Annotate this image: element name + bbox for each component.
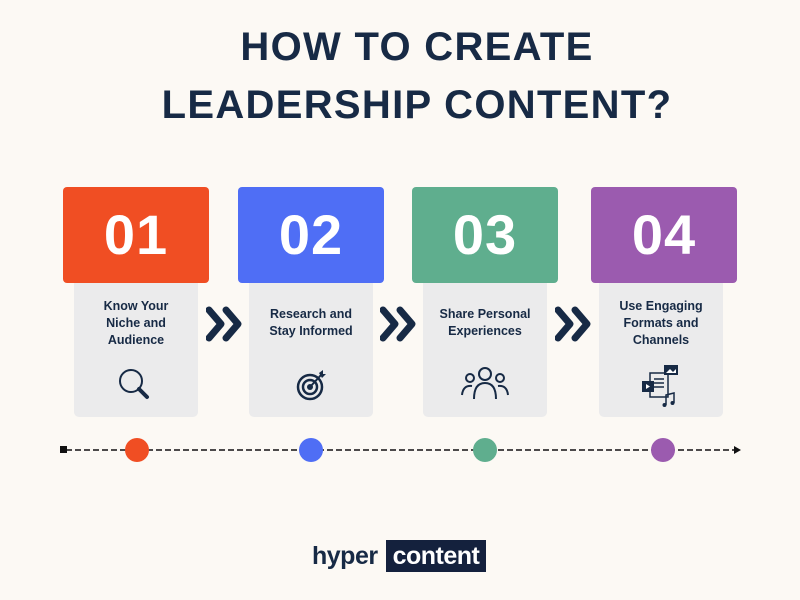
card 2: Stay Informed — [269, 324, 353, 338]
number 03: 03 — [453, 203, 517, 266]
dot 4 — [651, 438, 675, 462]
chevron 2 — [380, 306, 416, 342]
number 02 — [238, 187, 384, 283]
logo — [312, 540, 486, 572]
step 2 — [238, 187, 384, 417]
logo: hyper — [312, 542, 378, 570]
chevron 3 — [555, 306, 590, 342]
title — [162, 25, 672, 127]
dot 2 — [299, 438, 323, 462]
card 4: Formats and — [623, 316, 698, 330]
card 3: Share Personal — [439, 307, 530, 321]
icon: magnifier — [119, 369, 150, 400]
card 3: Experiences — [448, 324, 522, 338]
card 1: Niche and — [106, 316, 166, 330]
dot 3 — [473, 438, 497, 462]
card 4: Channels — [633, 333, 689, 347]
logo: content — [393, 542, 479, 570]
number 03 — [412, 187, 558, 283]
number 01 — [63, 187, 209, 283]
card 1: Audience — [108, 333, 164, 347]
card 3 — [423, 283, 547, 417]
card 2: Research and — [270, 307, 352, 321]
card 2 — [249, 283, 373, 417]
title: HOW TO CREATE — [240, 25, 594, 69]
timeline — [60, 446, 741, 454]
step 3 — [412, 187, 558, 417]
card 1: Know Your — [104, 299, 168, 313]
icon: people — [461, 367, 509, 399]
step 1 — [63, 187, 209, 417]
icon: media — [642, 365, 678, 407]
chevron 1 — [206, 306, 242, 342]
step 4 — [591, 187, 737, 417]
number 01: 01 — [104, 203, 168, 266]
number 04 — [591, 187, 737, 283]
card 1 — [74, 283, 198, 417]
title: LEADERSHIP CONTENT? — [162, 83, 672, 127]
dot 1 — [125, 438, 149, 462]
number 04: 04 — [632, 203, 696, 266]
number 02: 02 — [279, 203, 343, 266]
card 4 — [599, 283, 723, 417]
icon: target — [296, 370, 326, 400]
card 4: Use Engaging — [619, 299, 703, 313]
